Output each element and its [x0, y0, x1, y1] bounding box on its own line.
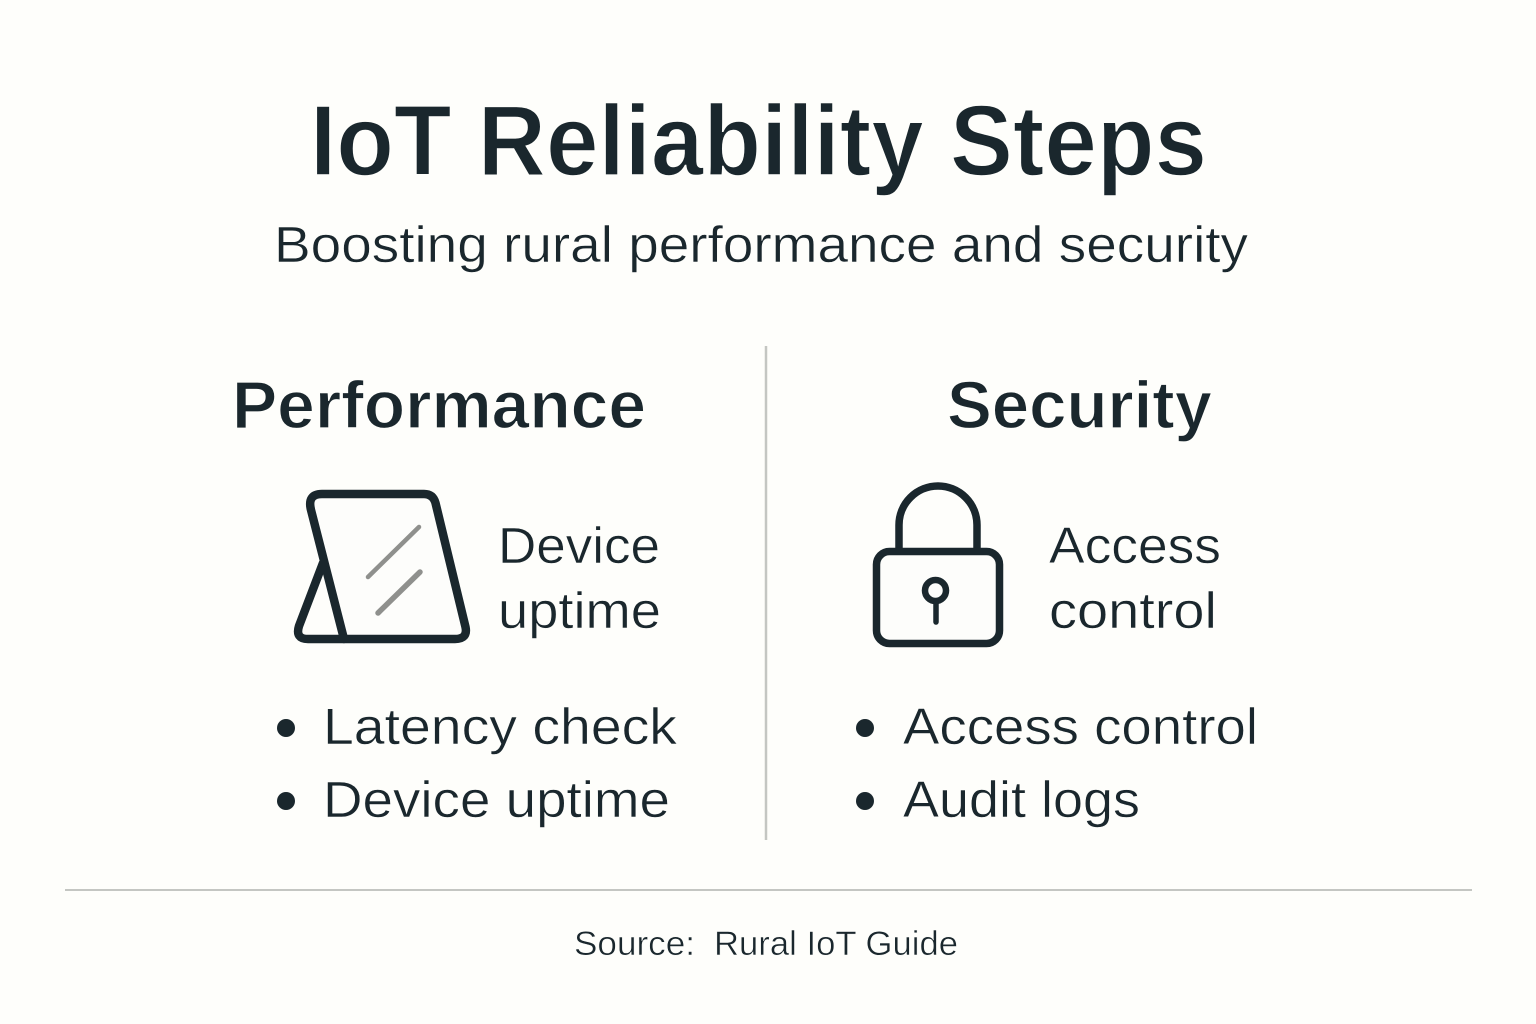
source note: Source:	[574, 925, 695, 963]
label: access control: control	[1049, 582, 1217, 639]
panel: performance	[232, 368, 678, 828]
bullet list: performance	[277, 698, 678, 828]
subtitle: Boosting rural performance and security	[274, 216, 1249, 273]
bullet list: security	[856, 698, 1258, 828]
panel: security	[856, 368, 1258, 828]
title: IoT Reliability Steps	[310, 85, 1207, 197]
heading: performance: Performance	[232, 368, 646, 443]
bullet list: security: Audit logs	[903, 771, 1140, 828]
label: device uptime: uptime	[498, 582, 661, 639]
bullet list: security: Access control	[903, 698, 1258, 755]
heading: security: Security	[947, 368, 1212, 443]
icon: tablet on stand	[298, 494, 466, 639]
label: access control: Access	[1049, 517, 1221, 574]
bullet list: performance: Device uptime	[323, 771, 670, 828]
icon: padlock	[876, 486, 1000, 644]
label: access control	[1049, 517, 1221, 639]
source note	[574, 925, 958, 963]
source note: Rural IoT Guide	[714, 925, 958, 963]
bullet list: performance: Latency check	[323, 698, 678, 755]
label: device uptime: Device	[498, 517, 660, 574]
label: device uptime	[498, 517, 661, 639]
